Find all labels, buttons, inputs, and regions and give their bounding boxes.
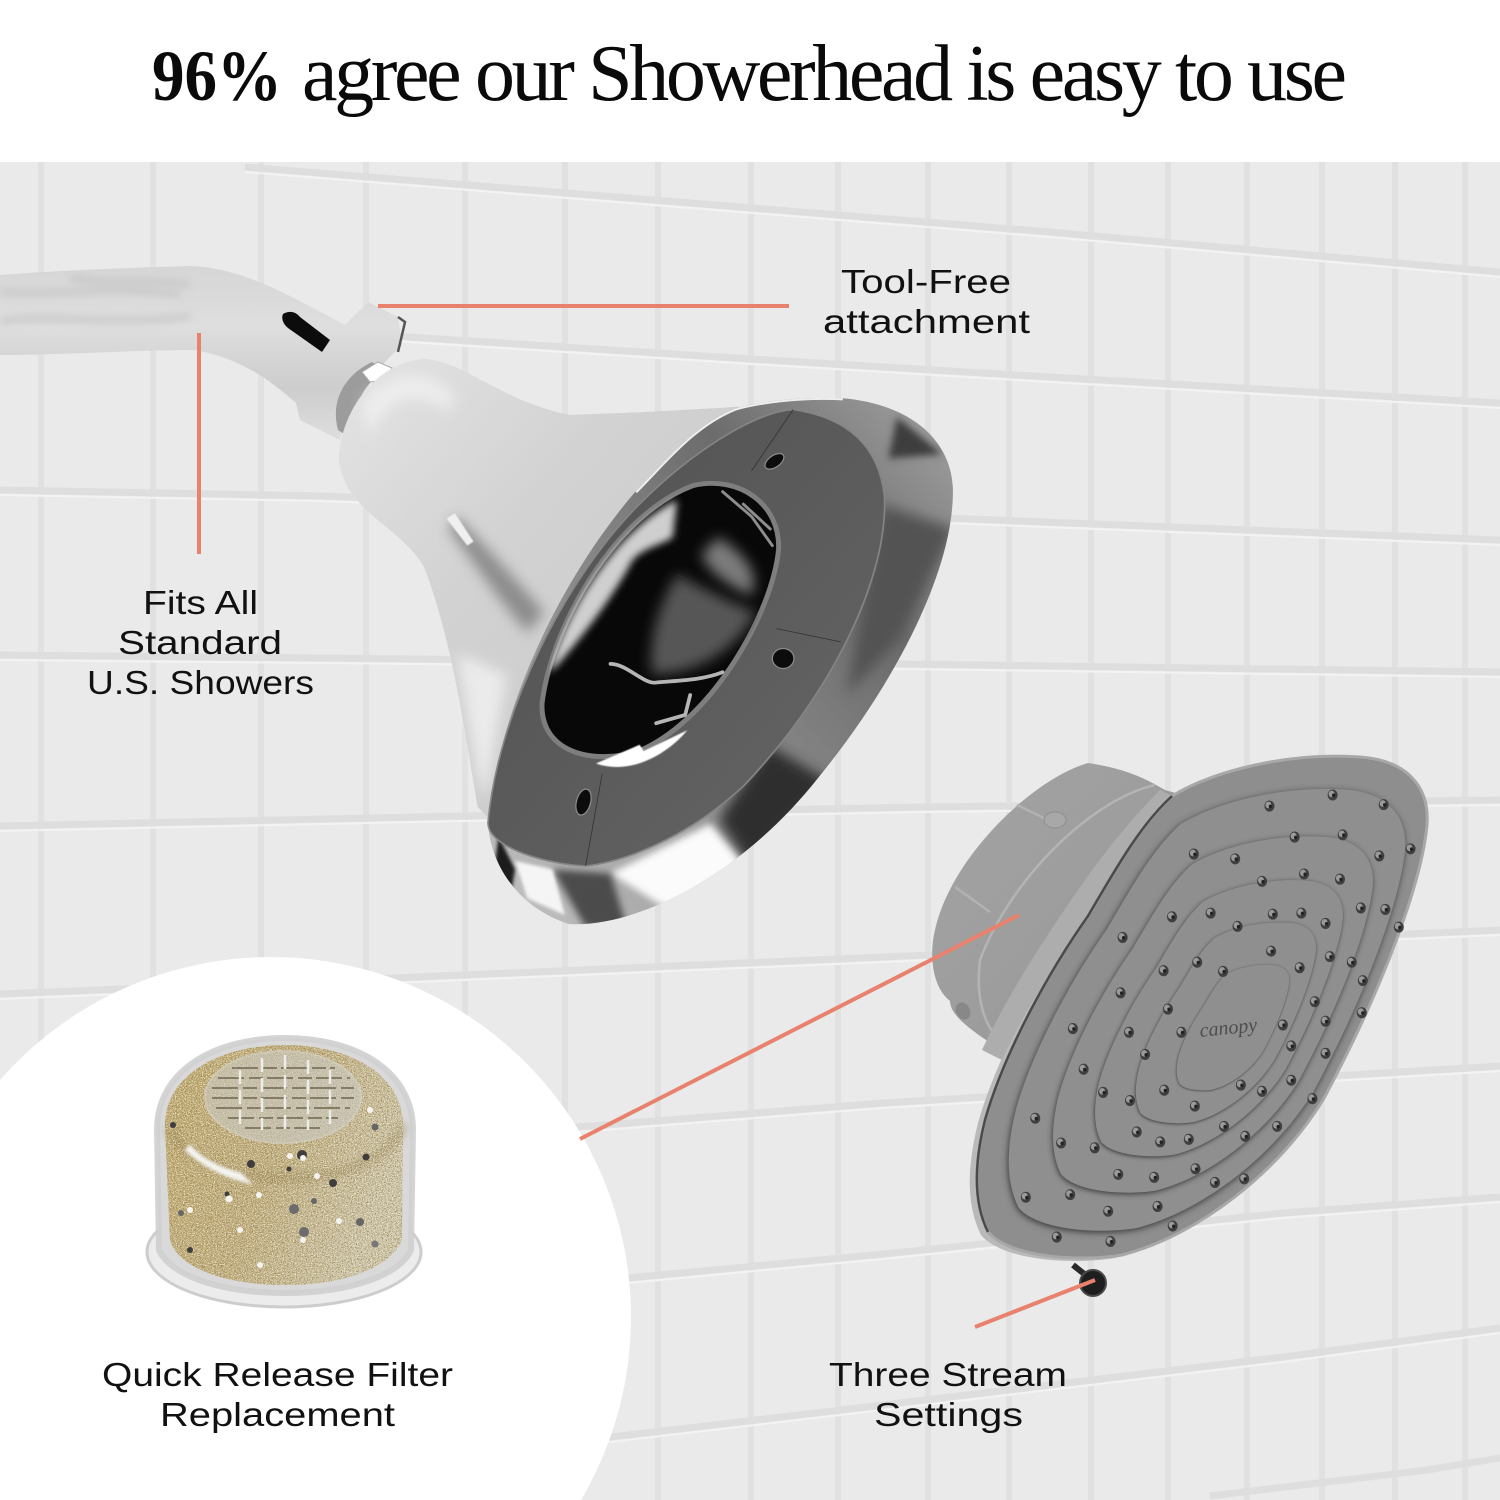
bell shading [362, 376, 544, 799]
spray nozzles [1021, 789, 1416, 1247]
label: three stream settings: Three Stream [829, 1356, 1067, 1393]
stream setting knob [1073, 1265, 1106, 1296]
label: three stream settings [829, 1356, 1067, 1433]
concentric rings [1009, 789, 1405, 1231]
label: fits all standard showers [87, 584, 314, 701]
central opening [542, 483, 779, 757]
light shoulder band [982, 790, 1172, 1060]
face seams [586, 409, 841, 866]
glass highlight [157, 1038, 413, 1293]
screw holes [573, 450, 794, 817]
callout line: stream settings [975, 1280, 1095, 1327]
grate on lid [205, 1051, 361, 1143]
label: quick release filter: Replacement [160, 1396, 395, 1433]
bell body [339, 359, 739, 820]
label: quick release filter [102, 1356, 453, 1433]
rear cylinder body [932, 763, 1200, 1060]
bright crescent below opening [596, 730, 687, 767]
label: fits all standard showers: Fits All [143, 584, 258, 621]
title: 96% [152, 36, 282, 116]
label: tool-free attachment [823, 263, 1030, 340]
base ring [147, 1197, 421, 1307]
callout line: tool-free attachment [378, 304, 789, 308]
label: quick release filter: Quick Release Filter [102, 1356, 453, 1393]
filter cartridge [147, 1038, 421, 1307]
opening interior reflections [548, 500, 756, 674]
flange outer chrome ring [478, 392, 967, 932]
callout line: fits all showers [197, 333, 201, 554]
flange dark inner face [488, 409, 885, 866]
clip wires [610, 492, 772, 723]
white circle panel [0, 957, 631, 1500]
callout line: filter to head [580, 915, 1019, 1139]
label: three stream settings: Settings [874, 1396, 1023, 1433]
top shading [168, 1125, 403, 1178]
label: fits all standard showers: U.S. Showers [87, 664, 314, 701]
label: fits all standard showers: Standard [118, 624, 282, 661]
outer rim [970, 759, 1420, 1261]
dome with gold media [157, 1038, 413, 1293]
label: tool-free attachment: Tool-Free [841, 263, 1011, 300]
speckles [170, 1122, 378, 1253]
title: agree our Showerhead is easy to use [302, 30, 1347, 118]
grey detachable shower head [932, 756, 1427, 1296]
nozzle face [977, 756, 1427, 1258]
label: tool-free attachment: attachment [823, 303, 1030, 340]
chrome shower arm [0, 266, 405, 442]
chrome shower head mount with open flange [339, 359, 967, 932]
logo: canopy [1198, 1014, 1258, 1042]
